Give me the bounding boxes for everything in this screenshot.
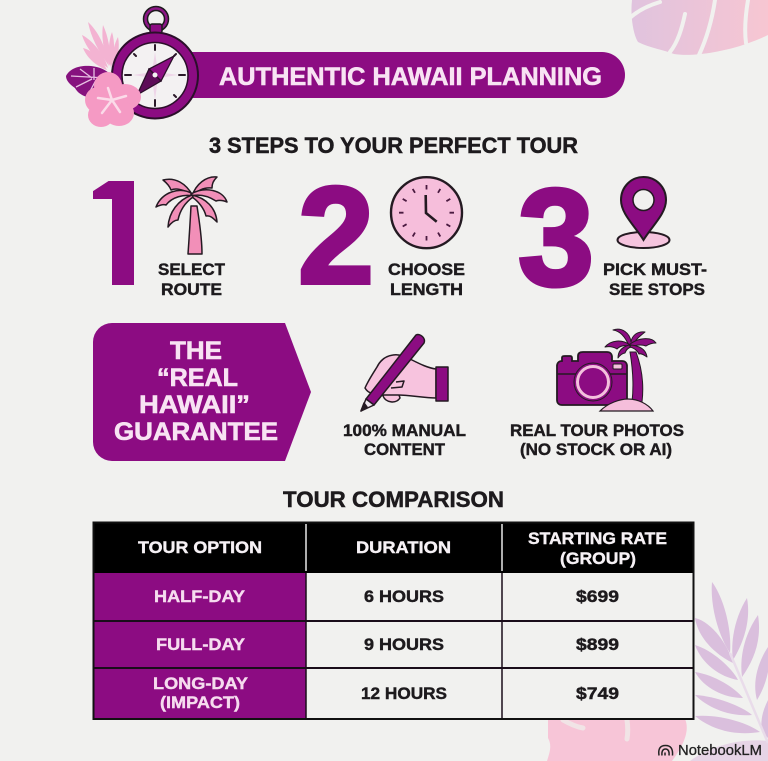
panel: real Hawaii guarantee — [93, 323, 311, 461]
photos label: (NO STOCK OR AI) — [520, 440, 672, 459]
row: full-day: $899 — [576, 635, 619, 654]
step 3 label — [603, 260, 707, 299]
row: long-day: $749 — [576, 684, 619, 703]
step 3 number: 3 — [518, 161, 594, 315]
row: half-day — [154, 587, 619, 606]
header row: TOUR OPTION — [138, 538, 262, 557]
step 3 label: PICK MUST- — [603, 260, 707, 279]
panel: real Hawaii guarantee: HAWAII” — [139, 391, 250, 419]
row: half-day: $699 — [576, 587, 619, 606]
heading: steps: 3 STEPS TO YOUR PERFECT TOUR — [209, 133, 578, 158]
title text: AUTHENTIC HAWAII PLANNING — [219, 63, 602, 91]
manual content label — [343, 421, 466, 459]
row: long-day: (IMPACT) — [160, 693, 240, 712]
header row — [138, 529, 667, 568]
icon: clock — [391, 177, 462, 248]
icon: hibiscus flower — [85, 72, 141, 127]
row: long-day — [153, 674, 619, 712]
NotebookLM badge: NotebookLM — [678, 743, 762, 759]
panel: real Hawaii guarantee: “REAL — [157, 364, 238, 392]
step 1 label: SELECT — [158, 260, 226, 279]
step 1 label — [158, 260, 226, 299]
step 2 label: CHOOSE — [388, 260, 465, 279]
comparison table — [93, 522, 694, 719]
icon: tropical leaves — [66, 22, 119, 98]
icon: camera and island palm — [557, 329, 656, 411]
manual content label: CONTENT — [364, 440, 446, 459]
manual content label: 100% MANUAL — [343, 421, 466, 440]
icon: map pin — [618, 177, 670, 248]
row: full-day: 9 HOURS — [364, 635, 444, 654]
header row: STARTING RATE — [528, 529, 667, 548]
photos label: REAL TOUR PHOTOS — [510, 421, 684, 440]
step 1 number: 1 — [78, 161, 155, 315]
row: long-day: 12 HOURS — [361, 684, 447, 703]
header row: DURATION — [356, 538, 451, 557]
panel: real Hawaii guarantee: GUARANTEE — [114, 418, 278, 446]
heading: tour comparison: TOUR COMPARISON — [283, 487, 504, 512]
row: full-day — [156, 635, 619, 654]
step 2 number: 2 — [298, 159, 374, 313]
row: half-day: HALF-DAY — [154, 587, 246, 606]
row: long-day: LONG-DAY — [153, 674, 249, 693]
step 1 label: ROUTE — [161, 280, 222, 299]
row: full-day: FULL-DAY — [156, 635, 246, 654]
panel: real Hawaii guarantee: THE — [170, 337, 222, 365]
step 3 label: SEE STOPS — [609, 280, 705, 299]
title banner — [185, 52, 625, 98]
decorative leaf: bottom pink monstera — [547, 719, 687, 761]
icon: hand writing with pen — [361, 335, 448, 411]
photos label — [510, 421, 684, 459]
icon: compass — [112, 8, 198, 118]
step 2 label — [388, 260, 465, 299]
step 2 label: LENGTH — [390, 280, 463, 299]
row: half-day: 6 HOURS — [364, 587, 444, 606]
icon: palm tree — [156, 177, 227, 254]
decorative leaf: bottom right palm — [690, 582, 768, 761]
header row: (GROUP) — [560, 549, 636, 568]
decorative leaf: top right — [631, 0, 768, 55]
